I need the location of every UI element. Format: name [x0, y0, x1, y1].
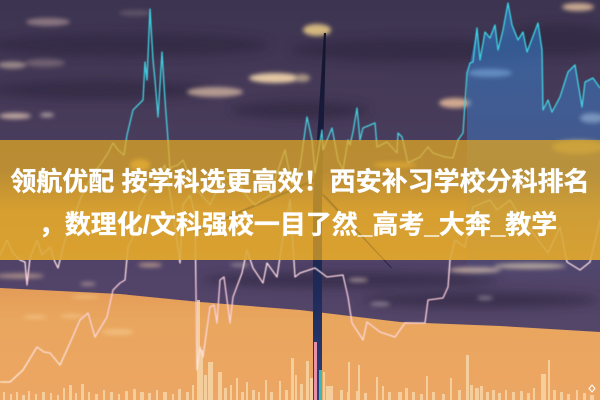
wind turbine — [193, 33, 392, 400]
price line: upper series — [0, 3, 600, 285]
title line 2: ，数理化/文科强校一目了然_高考_大奔_教学 — [39, 210, 557, 240]
dark cloud bands — [0, 24, 600, 308]
title — [10, 166, 590, 240]
sunset glow behind the band — [0, 170, 600, 260]
translucent gold title band — [0, 140, 600, 260]
orange sky highlights — [23, 296, 134, 335]
orange lower sky — [0, 288, 600, 400]
title line 1: 领航优配 按学科选更高效！西安补习学校分科排名 — [10, 166, 590, 196]
light clouds — [0, 3, 600, 171]
icon: sparkle watermark — [589, 385, 595, 392]
area under the chart line — [467, 3, 600, 285]
price line: lower series — [0, 165, 600, 382]
volume bars — [3, 300, 594, 400]
coloured volume bars — [314, 342, 322, 400]
wispy clouds in the dark strip — [0, 263, 566, 306]
